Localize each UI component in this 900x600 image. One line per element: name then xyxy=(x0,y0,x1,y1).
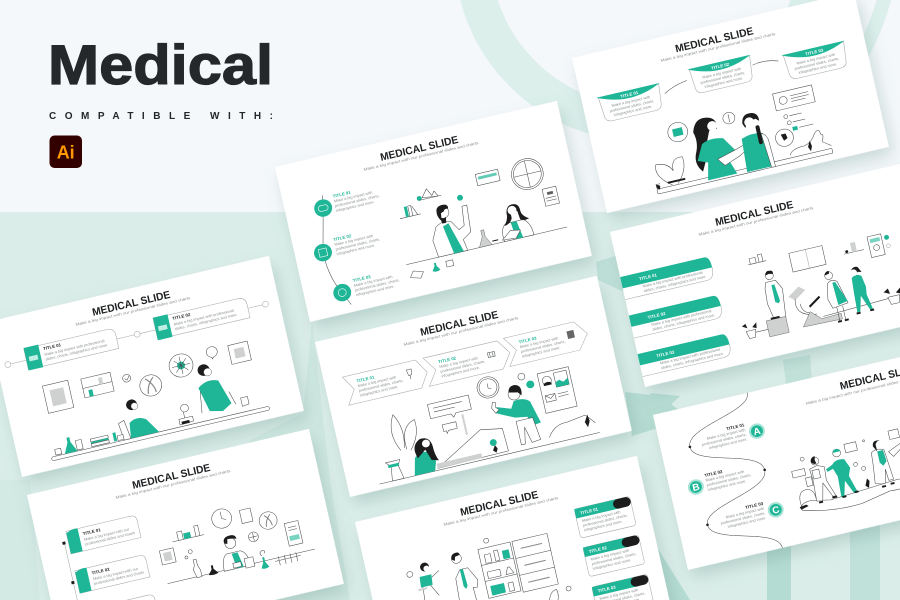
card: title 03 xyxy=(84,593,159,600)
item: A: infographics and more. xyxy=(709,437,748,450)
card: title 02: Make a big impact with xyxy=(702,67,741,80)
chevron: title 02: Make a big impact with xyxy=(439,356,478,369)
chevron: title 03: Make a big impact with xyxy=(519,336,559,349)
band: title 03: Make a big impact with professional xyxy=(660,348,721,365)
item: C: TITLE 03 xyxy=(745,501,764,510)
heading: MEDICAL SLIDE xyxy=(419,309,499,339)
item: title 03: Make a big impact with xyxy=(354,275,393,288)
item: title 02: TITLE 02 xyxy=(333,233,352,242)
subheading: Make a big impact with our professional slides and charts xyxy=(660,31,776,63)
item: title 03: professional slides, charts, xyxy=(355,278,400,292)
card: title 03: Make a big impact with xyxy=(796,53,835,66)
item: title 02: Make a big impact with xyxy=(334,234,373,247)
band: title 01: slides, charts, infographics and more. xyxy=(643,275,707,293)
item: C: infographics and more. xyxy=(727,516,767,529)
chevron: title 02: infographics and more. xyxy=(441,366,480,378)
item: title 01: Make a big impact with xyxy=(334,191,373,204)
box: title 02: TITLE 02 xyxy=(172,312,191,321)
item: C: C xyxy=(771,505,781,517)
box: title 01: slides, charts, infographics and more. xyxy=(45,343,109,362)
illustration: scientists in lab xyxy=(390,153,571,281)
item: B: B xyxy=(691,482,701,494)
item: B: Make a big impact with xyxy=(705,470,745,483)
card: title 01: Make a big impact with xyxy=(611,95,651,108)
card: title 01: professional slides and charts xyxy=(85,531,136,547)
card: title 02: infographics and more. xyxy=(592,558,632,571)
item: A: professional slides, charts, xyxy=(701,433,747,447)
chevron: title 03: infographics and more. xyxy=(522,346,561,359)
card: title 03: TITLE 03 xyxy=(805,47,824,57)
box: title 01: Make a big impact with professional xyxy=(44,339,105,357)
panel: slide with winding path xyxy=(653,324,900,570)
band: title 01 xyxy=(620,256,715,300)
item: title 01: professional slides, charts, xyxy=(335,194,380,208)
timeline line xyxy=(311,195,351,308)
card: title 01: TITLE 01 xyxy=(620,90,639,99)
card: title 03: infographics and more. xyxy=(798,62,838,75)
card: title 03 xyxy=(592,574,654,600)
item: B: TITLE 02 xyxy=(704,469,723,478)
box: title 01: TITLE 01 xyxy=(43,342,62,351)
box: title 02: Make a big impact with professional xyxy=(173,309,234,327)
box: title 02: slides, charts, infographics and more. xyxy=(174,313,238,331)
chevron: title 01 xyxy=(342,358,430,405)
chevron: title 03: professional slides, charts, xyxy=(520,340,566,354)
winding path xyxy=(680,393,784,564)
icon: Adobe Illustrator xyxy=(50,136,82,168)
illustration: patient consultation xyxy=(362,355,599,484)
subheading: Make a big impact with our professional slides and charts xyxy=(698,205,814,237)
band: title 02 xyxy=(629,295,723,338)
illustration: lab with microscope and staff xyxy=(727,220,900,344)
item: title 02: infographics and more. xyxy=(336,243,376,256)
card: title 01: Make a big impact with our xyxy=(84,527,130,542)
card: title 02: TITLE 02 xyxy=(91,567,111,576)
item: C: Make a big impact with xyxy=(725,507,765,519)
card: title 02: Make a big impact with xyxy=(590,549,630,562)
card: title 01: infographics and more. xyxy=(584,520,623,532)
item: A: TITLE 01 xyxy=(726,422,745,431)
heading: MEDICAL SLIDE xyxy=(714,199,794,229)
panel: slide with chevron steps xyxy=(315,276,632,497)
chevron: title 01: Make a big impact with xyxy=(357,375,397,388)
card: title 01: infographics and more. xyxy=(613,104,653,117)
card: title 02: TITLE 02 xyxy=(588,545,608,554)
item: title 01: TITLE 01 xyxy=(332,190,352,199)
card: title 01 xyxy=(596,83,665,123)
card: title 02 xyxy=(69,554,150,595)
item: C xyxy=(718,497,785,530)
heading: MEDICAL SLIDE xyxy=(91,289,171,319)
illustration: doctor and patient xyxy=(642,84,833,194)
card: title 01: Make a big impact with xyxy=(582,510,621,523)
card: title 03: TITLE 03 xyxy=(597,584,617,593)
card: title 03 xyxy=(781,41,850,81)
panel: slide with vertical timeline xyxy=(275,101,592,322)
card: title 01: professional slides, charts, xyxy=(609,99,655,113)
timeline connector xyxy=(4,301,269,368)
illustration: lab desk with woman and man xyxy=(36,337,270,461)
chevron: title 02: professional slides, charts, xyxy=(440,360,485,374)
card: title 01: TITLE 01 xyxy=(82,527,102,536)
heading: MEDICAL SLIDE xyxy=(379,134,459,164)
item: B: infographics and more. xyxy=(707,479,747,492)
band: title 01: Make a big impact with professional xyxy=(642,271,703,288)
item: C: professional slides, charts, xyxy=(720,511,766,526)
item: title 01: infographics and more. xyxy=(336,200,375,213)
subheading: Make a big impact with our professional slides and charts xyxy=(403,315,519,347)
item: title 01 xyxy=(312,184,381,219)
card: title 02: professional slides, charts, xyxy=(591,552,637,566)
card: title 02 xyxy=(687,55,756,95)
panel: slide with bottom-left cards xyxy=(27,429,344,600)
item: title 03: infographics and more. xyxy=(356,284,395,297)
chevron: title 02: TITLE 02 xyxy=(438,355,457,364)
illustration: medical team xyxy=(788,424,900,518)
icon: Adobe Illustrator: Ai xyxy=(57,142,75,162)
item: A xyxy=(699,418,766,452)
panel: slide at top right with three titled cards xyxy=(572,0,889,213)
panel: slide at bottom with cards at right xyxy=(355,456,672,600)
chevron: title 01: infographics and more. xyxy=(359,385,399,398)
item: title 03 xyxy=(331,268,401,303)
band: title 03: TITLE 03 xyxy=(656,349,675,358)
band: title 02: slides, charts, infographics and more. xyxy=(652,313,716,332)
card: title 02: professional slides, charts, xyxy=(700,71,746,85)
card: title 01: TITLE 01 xyxy=(580,506,599,516)
heading: MEDICAL SLIDE xyxy=(674,25,755,55)
panel: slide with connected circles at left xyxy=(0,256,304,477)
band: title 03 xyxy=(638,333,732,377)
illustration: doctor at desk xyxy=(153,490,316,591)
item: title 03: TITLE 03 xyxy=(352,274,372,283)
item: title 02: professional slides, charts, xyxy=(335,237,381,252)
title: Medical xyxy=(48,33,273,96)
band: title 02: Make a big impact with professional xyxy=(651,309,712,327)
card: title 01 xyxy=(574,496,636,538)
card: title 01: professional slides, charts, xyxy=(583,513,628,528)
chevron: title 03 xyxy=(504,319,591,366)
item: B: professional slides, charts, xyxy=(706,473,752,487)
heading: MEDICAL SLIDE xyxy=(459,489,539,519)
card: title 01 xyxy=(60,514,141,555)
band: title 03: slides, charts, infographics and more. xyxy=(661,352,724,370)
item: A: A xyxy=(752,426,762,438)
subheading: Make a big impact with our professional slides and charts xyxy=(363,140,479,172)
chevron: title 02 xyxy=(423,339,513,386)
item: B xyxy=(686,463,753,496)
item: title 02 xyxy=(311,227,382,263)
card: title 02 xyxy=(583,535,645,577)
band: title 01: TITLE 01 xyxy=(639,272,658,281)
subtitle: compatible with: COMPATIBLE WITH: xyxy=(49,111,273,122)
band: title 02: TITLE 02 xyxy=(647,311,667,320)
card: title 02: Make a big impact with our xyxy=(93,567,139,581)
connectors xyxy=(663,58,780,94)
panel: slide with rounded teal bands xyxy=(610,164,900,387)
card: title 02: professional slides and charts xyxy=(94,570,144,586)
chevron: title 01: TITLE 01 xyxy=(356,374,375,384)
chevron: title 03: TITLE 03 xyxy=(518,335,538,345)
heading: MEDICAL SLIDE xyxy=(131,462,211,492)
item: A: Make a big impact with xyxy=(707,428,746,441)
box: title 02 xyxy=(153,296,250,340)
chevron: title 01: professional slides, charts, xyxy=(358,379,404,393)
illustration: pharmacy shelves with doctor and boy xyxy=(403,522,574,600)
subheading: Make a big impact with our professional slides and charts xyxy=(443,495,559,527)
subheading: Make a big impact with our professional slides and charts xyxy=(115,468,231,500)
box: title 01 xyxy=(24,327,119,371)
card: title 02: TITLE 02 xyxy=(711,62,730,71)
card: title 02: infographics and more. xyxy=(704,76,744,89)
subheading: Make a big impact with our professional slides and charts xyxy=(75,295,191,327)
card: title 03: professional slides, charts, xyxy=(794,57,840,71)
